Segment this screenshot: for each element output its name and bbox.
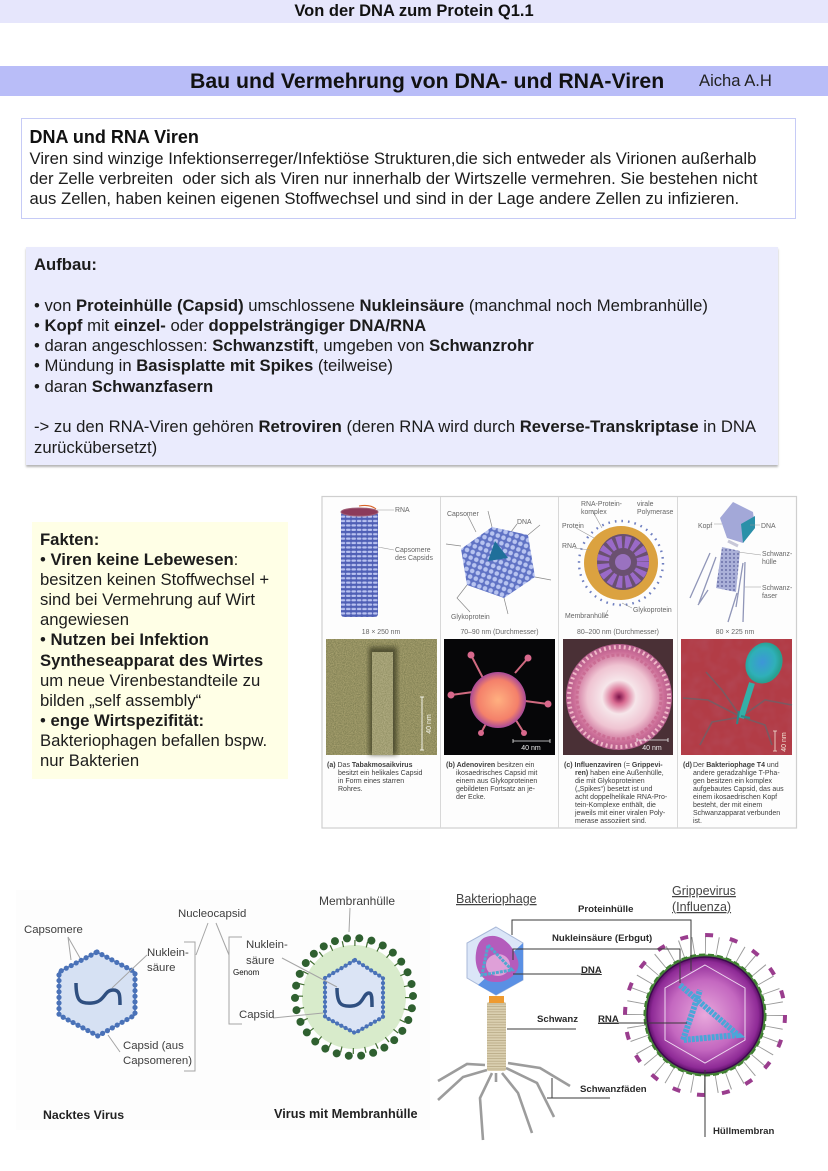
caption c: (= Grippevi- — [624, 762, 663, 769]
diagram labels: Capsid (aus — [123, 1040, 184, 1052]
caption d: einem ikosaedrischen Kopf — [693, 794, 777, 801]
phage and influenza labels: Hüllmembran — [713, 1126, 774, 1137]
icon: bacteriophage — [438, 927, 570, 1140]
icon: naked virus — [59, 952, 135, 1036]
caption b: einem aus Glykoproteinen — [456, 778, 537, 785]
Fakten text: um neue Virenbestandteile zu — [40, 671, 260, 690]
caption d: gen besitzen ein komplex — [693, 778, 772, 785]
caption c: tein-Komplexe enthält, die — [575, 802, 656, 809]
illustration: influenza virus: Membranhülle — [565, 613, 609, 620]
definition text — [30, 149, 758, 208]
illustration: bacteriophage T4 — [690, 502, 792, 636]
Fakten text: sind bei Vermehrung auf Wirt — [40, 590, 255, 609]
photo: adenovirus — [444, 639, 555, 755]
diagram labels — [24, 894, 395, 1067]
Aufbau text: • Mündung in Basisplatte mit Spikes (teilweise) — [34, 356, 393, 375]
diagram labels: Membranhülle — [319, 894, 395, 908]
caption d: aufgebautes Capsid, das aus — [693, 786, 784, 793]
definition text: Viren sind winzige Infektionserreger/Infektiöse Strukturen,die sich entweder als Virionen außerhalb — [30, 149, 756, 168]
illustration: adenovirus — [446, 511, 551, 636]
caption c: die mit Glykoproteinen — [575, 778, 645, 785]
illustration: influenza virus: virale — [637, 501, 654, 508]
Fakten text: • Nutzen bei Infektion — [40, 630, 209, 649]
main title: Bau und Vermehrung von DNA- und RNA-Viren — [190, 69, 664, 93]
illustration: bacteriophage T4: hülle — [762, 559, 777, 566]
caption: Virus mit Membranhülle: Virus mit Membranhülle — [274, 1107, 418, 1121]
Aufbau text: Aufbau: — [34, 255, 97, 274]
Fakten text: Fakten: — [40, 530, 99, 549]
photo: influenza virus: 40 nm — [642, 745, 662, 752]
diagram: naked and enveloped virus — [16, 890, 430, 1130]
diagram labels: säure — [147, 962, 176, 974]
caption a: Rohres. — [338, 786, 363, 793]
illustration: bacteriophage T4: Schwanz- — [762, 551, 792, 558]
illustration: bacteriophage T4: 80 × 225 nm — [716, 629, 755, 636]
Fakten text: Bakteriophagen befallen bspw. — [40, 731, 267, 750]
diagram labels: Capsid — [239, 1009, 274, 1021]
Fakten text: angewiesen — [40, 610, 129, 629]
caption: Nacktes Virus: Nacktes Virus — [43, 1108, 124, 1122]
Aufbau text: • daran angeschlossen: Schwanzstift, umgeben von Schwanzrohr — [34, 336, 534, 355]
caption c: jeweils mit einer viralen Poly- — [574, 810, 666, 817]
photo: tobacco mosaic virus: 40 nm — [426, 714, 433, 734]
Aufbau text: • daran Schwanzfasern — [34, 377, 213, 396]
phage and influenza labels: Nukleinsäure (Erbgut) — [552, 933, 652, 944]
illustration: bacteriophage T4: DNA — [761, 523, 776, 530]
diagram labels: säure — [246, 955, 274, 967]
caption a: (a) — [327, 762, 338, 769]
Aufbau text — [34, 255, 756, 457]
caption c: acht doppelhelikale RNA-Pro- — [575, 794, 668, 801]
caption d: besteht, der mit einem — [693, 802, 762, 809]
illustration: tobacco mosaic virus: RNA — [395, 507, 410, 514]
illustration: influenza virus: Glykoprotein — [633, 607, 672, 614]
icon: influenza virus — [625, 935, 785, 1095]
Aufbau text: • von Proteinhülle (Capsid) umschlossene Nukleinsäure (manchmal noch Membranhülle) — [34, 296, 708, 315]
Aufbau text: • Kopf mit einzel- oder doppelsträngiger DNA/RNA — [34, 316, 426, 335]
photo: influenza virus — [563, 639, 673, 755]
illustration: influenza virus: RNA-Protein- — [581, 501, 622, 508]
caption b: der Ecke. — [456, 794, 486, 801]
illustration: adenovirus: 70–90 nm (Durchmesser) — [460, 629, 539, 636]
diagram labels: Capsomere — [24, 924, 83, 936]
phage and influenza labels: Schwanzfäden — [580, 1084, 647, 1095]
leader lines — [507, 920, 705, 1137]
Aufbau text: zurückübersetzt) — [34, 438, 157, 457]
illustration: tobacco mosaic virus — [341, 505, 433, 636]
caption d: (d) — [683, 762, 694, 769]
caption d: Schwanzapparat verbunden — [693, 810, 780, 817]
panel: Fakten — [32, 522, 288, 779]
illustration: bacteriophage T4: Schwanz- — [762, 585, 792, 592]
phage and influenza labels: RNA — [598, 1014, 619, 1025]
caption b: besitzen ein — [497, 762, 535, 769]
phage and influenza labels: Proteinhülle — [578, 904, 633, 915]
photo: bacteriophage T4 — [681, 636, 792, 755]
illustration: influenza virus — [562, 501, 674, 636]
main title band — [0, 66, 828, 96]
Fakten text: Syntheseapparat des Wirtes — [40, 651, 263, 670]
Fakten text: • enge Wirtspezifität: — [40, 711, 204, 730]
illustration: bacteriophage T4: faser — [762, 593, 778, 600]
illustration: tobacco mosaic virus: 18 × 250 nm — [362, 629, 401, 636]
definition text: der Zelle verbreiten oder sich als Viren nur innerhalb der Wirtszelle vermehren. Sie bestehen nicht — [30, 169, 758, 188]
diagram labels: Nucleocapsid — [178, 908, 246, 920]
Fakten text: • Viren keine Lebewesen: — [40, 550, 238, 569]
diagram labels: Nuklein- — [246, 939, 288, 951]
caption c: („Spikes“) besetzt ist und — [575, 786, 653, 793]
caption c: (c) Influenzaviren — [564, 762, 624, 769]
caption b: ikosaedrisches Capsid mit — [456, 770, 537, 777]
heading: Grippevirus: (Influenza) — [672, 900, 731, 914]
panel: Aufbau — [26, 247, 778, 465]
diagram labels: Genom — [233, 968, 260, 977]
diagram labels: Capsomeren) — [123, 1055, 192, 1067]
illustration: influenza virus: RNA — [562, 543, 577, 550]
caption d: ist. — [693, 818, 702, 825]
caption a: Das Tabakmosaikvirus — [338, 762, 412, 769]
Fakten text: bilden „self assembly“ — [40, 691, 201, 710]
Fakten text: besitzen keinen Stoffwechsel + — [40, 570, 269, 589]
definition heading: DNA und RNA Viren — [30, 127, 199, 147]
leader lines and brackets — [68, 908, 350, 1071]
diagram labels: Nuklein- — [147, 947, 189, 959]
illustration: adenovirus: Glykoprotein — [451, 614, 490, 621]
caption d: andere geradzahlige T-Pha- — [693, 770, 780, 777]
caption c: haben eine Außenhülle, — [590, 770, 664, 777]
illustration: tobacco mosaic virus: des Capsids — [395, 555, 433, 562]
panel: definition — [21, 118, 796, 219]
phage and influenza labels: DNA — [581, 965, 602, 976]
heading: Bakteriophage: Bakteriophage — [456, 892, 537, 906]
Fakten text: nur Bakterien — [40, 751, 139, 770]
illustration: influenza virus: komplex — [581, 509, 607, 516]
caption d: Der — [693, 762, 706, 769]
caption b: gebildeten Fortsatz an je- — [456, 786, 536, 793]
definition text: aus Zellen, haben keinen eigenen Stoffwechsel und sind in der Lage andere Zellen zu infizieren. — [30, 189, 739, 208]
caption b: (b) Adenoviren — [446, 762, 497, 769]
top header band — [0, 0, 828, 23]
photo: tobacco mosaic virus — [326, 639, 437, 755]
author: Aicha A.H — [699, 71, 772, 90]
illustration: adenovirus: Capsomer — [447, 511, 479, 518]
illustration: influenza virus: 80–200 nm (Durchmesser) — [577, 629, 659, 636]
caption a: besitzt ein helikales Capsid — [338, 770, 423, 777]
panel: textbook virus overview — [322, 496, 796, 828]
top header band: Von der DNA zum Protein Q1.1 — [294, 2, 534, 20]
heading: Grippevirus: Grippevirus — [672, 884, 736, 898]
Fakten text — [40, 530, 269, 770]
phage and influenza labels — [537, 904, 774, 1137]
illustration: bacteriophage T4: Kopf — [698, 523, 712, 530]
photo: adenovirus: 40 nm — [521, 745, 541, 752]
phage and influenza labels: Schwanz — [537, 1014, 578, 1025]
diagram: bacteriophage and influenza — [438, 884, 785, 1140]
illustration: tobacco mosaic virus: Capsomere — [395, 547, 431, 554]
caption c: ren) — [575, 770, 590, 777]
illustration: influenza virus: Polymerase — [637, 509, 674, 516]
caption c: merase assoziiert sind. — [575, 818, 647, 825]
caption d: Bakteriophage T4 und — [706, 762, 779, 769]
illustration: influenza virus: Protein — [562, 523, 584, 530]
caption a: in Form eines starren — [338, 778, 404, 785]
illustration: adenovirus: DNA — [517, 519, 532, 526]
Aufbau text: -> zu den RNA-Viren gehören Retroviren (deren RNA wird durch Reverse-Transkriptase in DNA — [34, 417, 756, 436]
photo: bacteriophage T4: 40 nm — [781, 732, 788, 752]
icon: enveloped virus — [294, 937, 414, 1057]
